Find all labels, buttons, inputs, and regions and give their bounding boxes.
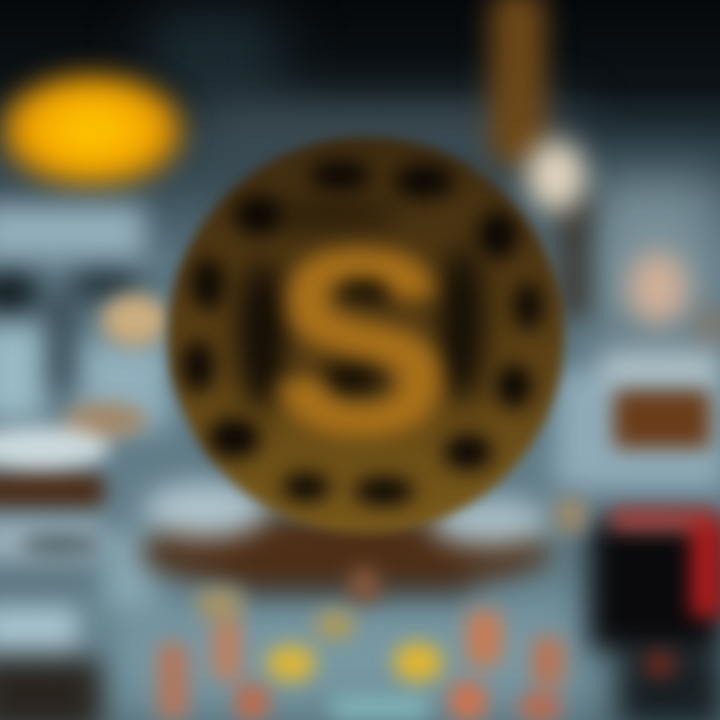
coin rim notches bbox=[182, 160, 542, 505]
pearl highlight bbox=[526, 140, 586, 212]
small gold tokens and figures bbox=[158, 498, 586, 720]
left pale blocks bbox=[0, 205, 170, 720]
coin disc bbox=[168, 137, 564, 533]
brass post bbox=[490, 0, 590, 320]
coin inner shadow bbox=[238, 201, 484, 409]
glowing orange light bbox=[2, 74, 182, 186]
right tower bbox=[555, 252, 720, 720]
dollar S glyph: S bbox=[274, 195, 448, 488]
right brown window and red cloth bbox=[610, 390, 720, 678]
central coin platform bbox=[140, 482, 550, 596]
left stacked plates bbox=[0, 294, 169, 559]
gold dollar coin bbox=[168, 137, 564, 533]
